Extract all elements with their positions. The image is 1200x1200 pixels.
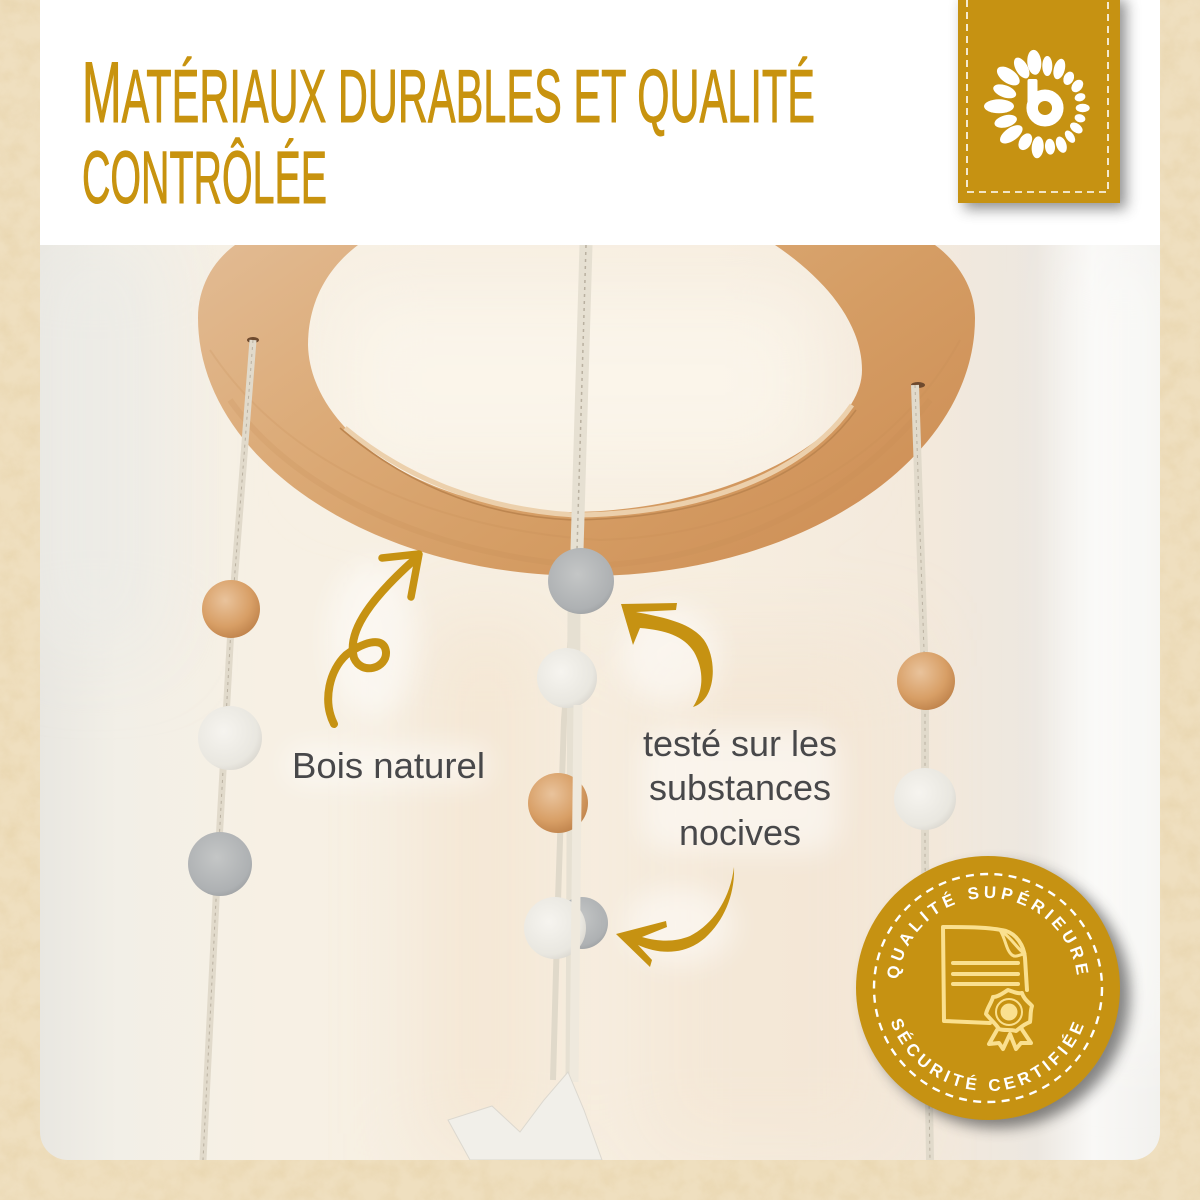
arrow: to wood ring [328,554,419,724]
label: testé sur les substances nocives [643,723,837,853]
arrow: to top bead [621,603,713,707]
star ornament [448,1072,602,1160]
seal text: QUALITÉ SUPÉRIEURE [887,886,1088,978]
text and arrow glow [285,560,840,965]
label: testé sur les substances nocives: testé sur les [643,723,837,764]
seal text [887,886,1088,1091]
quality seal badge [856,854,1140,1138]
right string with beads [894,385,956,1160]
title: CONTRÔLÉE [82,136,327,219]
wood ring [198,245,975,576]
label: testé sur les substances nocives: substances [649,767,831,808]
left string with beads [188,340,262,1160]
seal text: SÉCURITÉ CERTIFIÉE [892,1018,1084,1091]
photo panel: wooden baby mobile [40,245,1160,1160]
centre strings with beads [524,245,614,1082]
label: testé sur les substances nocives: nocives [679,812,801,853]
title [82,45,815,219]
icon: flower logo [984,49,1090,159]
icon: certificate [943,927,1032,1049]
header panel [40,0,1160,245]
brand tag with flower logo [958,0,1126,209]
label: Bois naturel: Bois naturel [292,745,485,786]
arrow: to lower bead [616,867,734,967]
